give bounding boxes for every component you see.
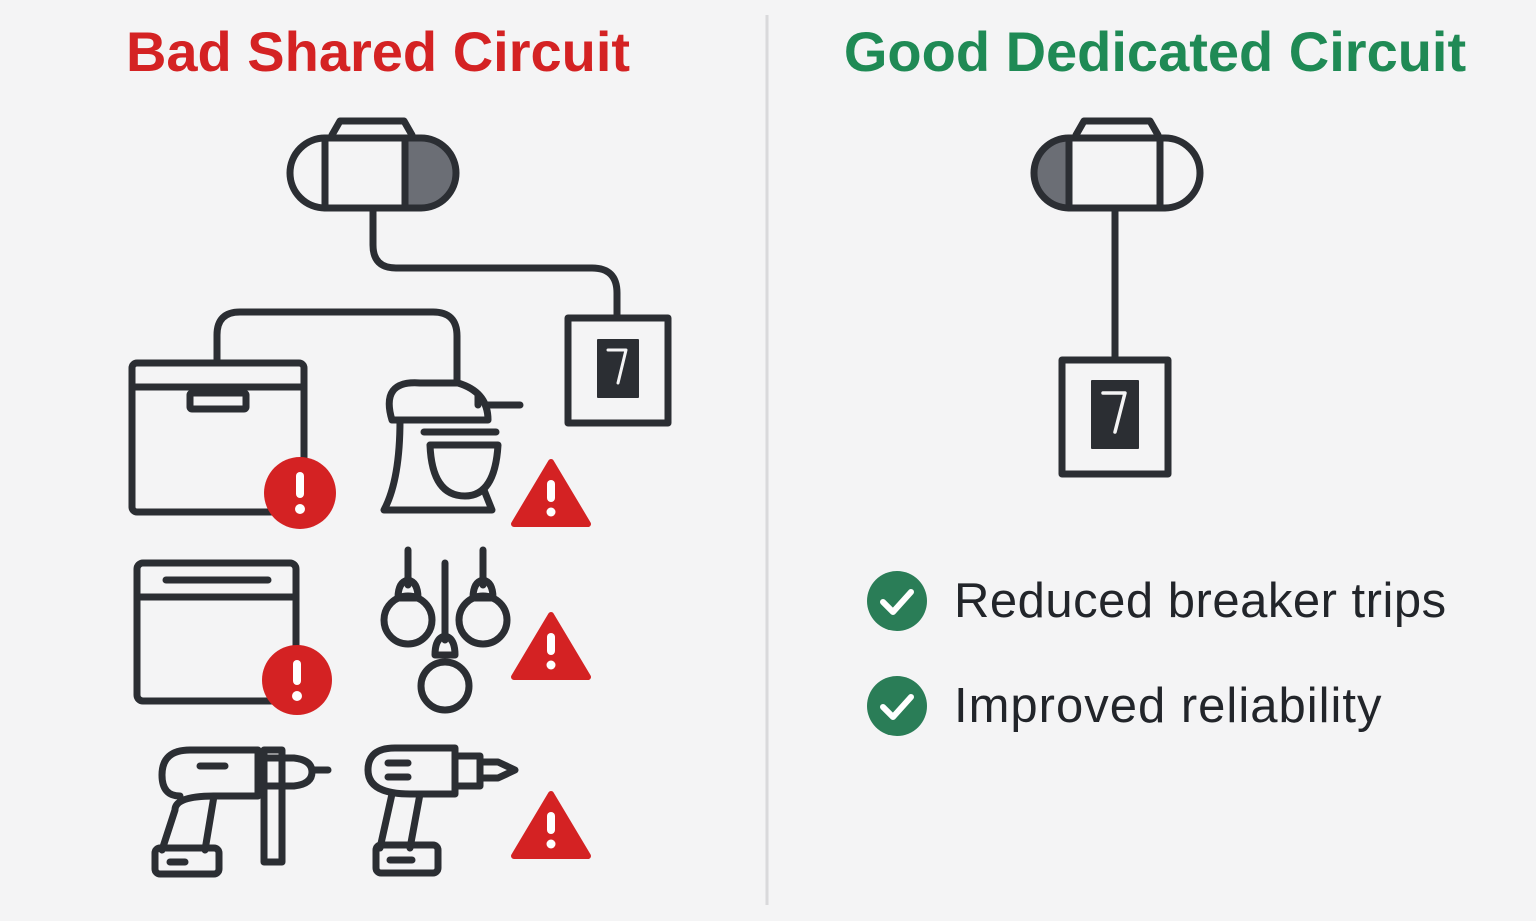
icon: freezer [132,363,304,512]
panel: good dedicated circuit [1034,121,1200,474]
benefit: reduced breaker trips: Reduced breaker trips [954,574,1447,628]
icon: breaker right [1034,121,1200,208]
icon: mixer [384,383,520,510]
icon: warning drill [514,794,588,856]
icon: drill 1 [155,750,328,874]
icon: warning mixer [514,462,588,524]
icon: outlet right [1062,360,1168,474]
icon: outlet [568,318,668,423]
icon: alert circle oven [262,645,332,715]
panel: bad shared circuit [132,121,668,874]
wire: branch [217,312,457,380]
icon: breaker left [290,121,456,208]
title: good: Good Dedicated Circuit [844,20,1466,83]
icon: pendant lights [384,550,507,710]
icon: drill 2 [368,748,515,873]
wire: dedicated [1112,211,1118,358]
wire: breaker to outlet [373,211,617,318]
icon: oven [137,563,296,701]
icon: warning lights [514,615,588,677]
title: bad: Bad Shared Circuit [126,20,630,83]
benefit: improved reliability: Improved reliability [954,679,1382,733]
icon: alert circle freezer [264,457,336,529]
